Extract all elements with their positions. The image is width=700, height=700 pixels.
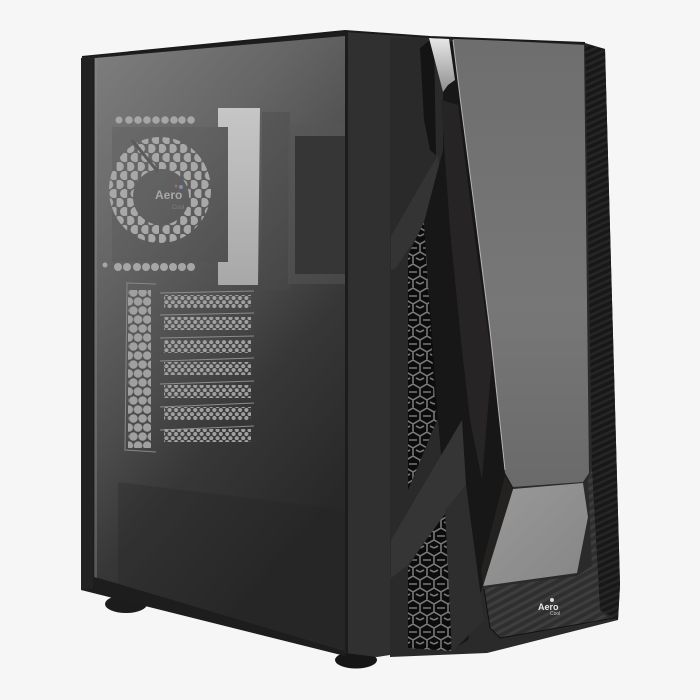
base logo: Aero (538, 602, 559, 612)
carbon base badge (484, 470, 610, 638)
product illustration: PC case (81, 30, 620, 668)
left frame strip (81, 57, 93, 590)
dark centre strip (429, 190, 462, 420)
upper fin dark recess (420, 40, 436, 155)
left foot (105, 595, 147, 613)
interior: vertical vent strip (125, 283, 156, 452)
lower panel bevel (481, 476, 513, 586)
lower light panel (483, 483, 588, 586)
power supply shroud (118, 482, 345, 650)
interior: motherboard cutout (262, 112, 345, 290)
upper fin (390, 40, 443, 240)
top hole row (116, 116, 195, 124)
right foot (335, 652, 377, 668)
diagonal brace upper (391, 155, 442, 270)
top mesh vent (408, 222, 437, 490)
interior: fan mount with vent holes (102, 116, 211, 271)
bottom pillar (445, 485, 484, 652)
front spine (345, 31, 430, 657)
side glass panel (81, 31, 345, 656)
interior: light cutout plate (218, 108, 260, 285)
bright top reflection (429, 38, 455, 92)
left edge highlight (94, 58, 97, 578)
bottom hole row (102, 262, 195, 271)
base logo (538, 598, 560, 617)
top lid edge (82, 31, 585, 57)
right carbon side band (585, 44, 620, 620)
lower mesh vent (408, 510, 452, 651)
interior: fan mount with vent holes: Cool (172, 205, 184, 211)
fan hex vents (108, 136, 214, 246)
centre spine facet (441, 100, 492, 480)
panel edge highlight (453, 40, 505, 470)
front fascia body (390, 37, 620, 657)
diagonal brace lower (391, 420, 466, 578)
dark centre facet (424, 40, 513, 650)
interior: expansion slots (160, 291, 254, 442)
base logo: Cool (550, 611, 560, 617)
fan spoke (132, 140, 158, 172)
fan logo: Aero (155, 188, 182, 202)
large grey front panel (453, 38, 589, 487)
spine corner shade (345, 31, 348, 654)
